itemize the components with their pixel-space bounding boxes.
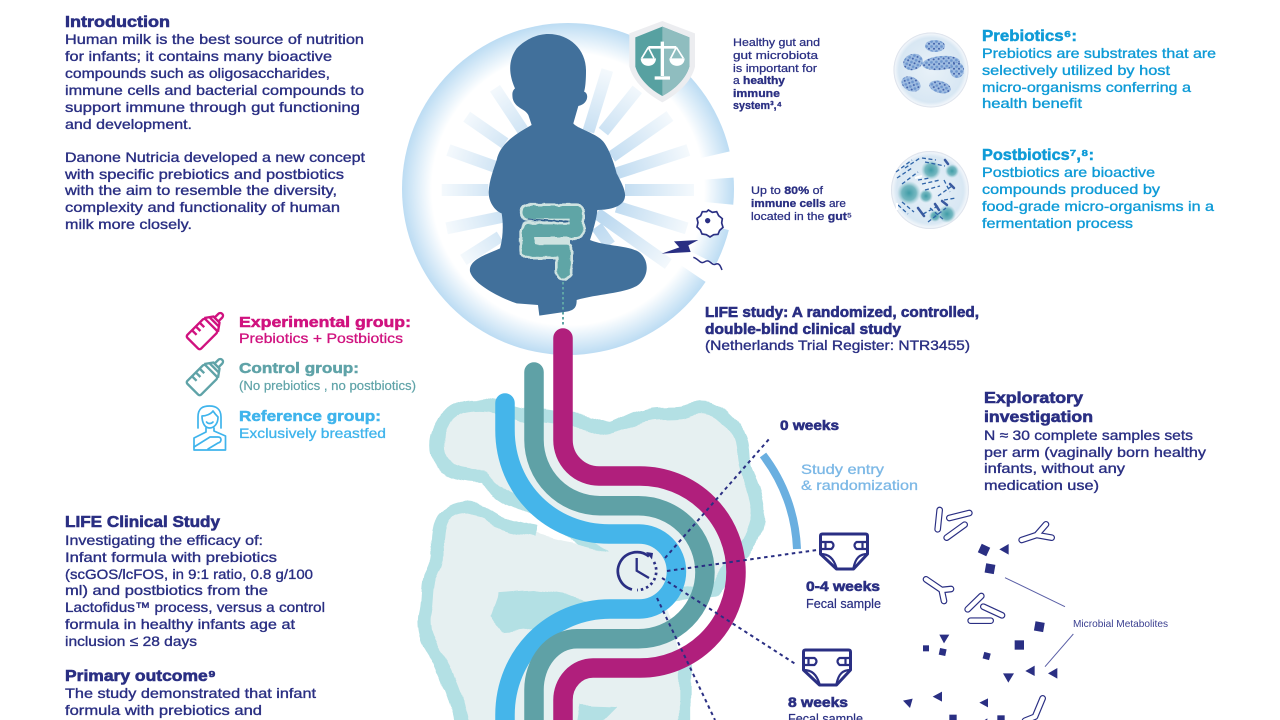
text block: introduction paragraph 2: Danone Nutricia developed a new concept [65, 149, 365, 165]
text: exploratory investigation: infants, without any [984, 460, 1125, 476]
text block: primary outcome [65, 685, 316, 718]
text block: primary outcome: formula with prebiotics and [65, 702, 262, 718]
heading: postbiotics: Postbiotics⁷,⁸: [982, 147, 1094, 164]
text block: introduction paragraph 2: with specific prebiotics and postbiotics [64, 166, 344, 182]
label: 0-4 weeks: 0-4 weeks [806, 578, 880, 594]
text block: introduction paragraph 1: compounds such as oligosaccharides, [65, 65, 330, 81]
icon: teal bottle [186, 353, 229, 396]
text block: study description: Lactofidus™ process, versus a control [65, 599, 325, 615]
text block: introduction paragraph 1: and development. [65, 116, 192, 132]
icon: prebiotics petri dish [894, 32, 968, 108]
illustration: gut background [425, 405, 759, 720]
label: 8 weeks: 8 weeks [788, 694, 848, 710]
leader lines [1005, 578, 1073, 667]
text block: introduction paragraph 1 [65, 31, 364, 132]
icon: breastfeeding mother [194, 406, 226, 450]
label: 0-4 weeks [806, 578, 881, 611]
label: experimental group: Experimental group: [239, 314, 411, 331]
text: healthy gut callout: Healthy gut and [733, 37, 820, 49]
text block: introduction paragraph 2: complexity and functionality of human [65, 199, 340, 215]
halo circle [402, 23, 734, 355]
metabolites [903, 544, 1057, 720]
label: 8 weeks [788, 694, 863, 720]
text block: study description: inclusion ≤ 28 days [65, 633, 197, 649]
label: control group: (No prebiotics , no postbiotics) [239, 378, 416, 393]
text: prebiotics: micro-organisms conferring a [982, 79, 1191, 95]
icon: magenta bottle [186, 307, 229, 350]
heading: LIFE clinical study: LIFE Clinical Study [65, 514, 220, 531]
chart: three group pathways [505, 338, 736, 720]
label: study entry and randomization: Study entry [801, 461, 884, 477]
rays [442, 70, 694, 264]
legend: study groups [186, 307, 416, 450]
text: healthy gut callout: gut microbiota [733, 50, 819, 62]
icon: immune cell, lightning and bacterium [662, 210, 723, 270]
text block: study description: formula in healthy infants age at [65, 616, 295, 632]
text: exploratory investigation: Exploratory [984, 390, 1083, 407]
arc: study entry timeline [763, 455, 797, 549]
text: exploratory investigation: investigation [984, 409, 1093, 426]
pathway: reference group [505, 403, 676, 720]
text: prebiotics: health benefit [982, 95, 1082, 111]
text: healthy gut callout: a healthy [733, 75, 786, 87]
label: microbial metabolites: Microbial Metabolites [1073, 618, 1168, 630]
label: experimental group [239, 314, 411, 346]
icon: diaper 8 weeks [804, 650, 850, 685]
heading: introduction: Introduction [65, 14, 170, 31]
label: experimental group: Prebiotics + Postbiotics [239, 330, 403, 346]
text: immune cells callout: Up to 80% of [751, 185, 824, 197]
text: exploratory investigation: per arm (vaginally born healthy [984, 444, 1206, 460]
label: control group: Control group: [239, 360, 359, 377]
text: postbiotics: compounds produced by [982, 181, 1160, 197]
text: immune cells callout [751, 185, 852, 223]
label: control group [239, 360, 416, 393]
label: reference group [239, 408, 386, 441]
text block: primary outcome: The study demonstrated that infant [65, 685, 316, 701]
text: immune cells callout: located in the gut⁵ [751, 211, 852, 223]
pathway: experimental group [563, 338, 736, 720]
text: exploratory investigation: medication use) [984, 477, 1099, 493]
text block: study description: ml) and postbiotics from the [65, 582, 268, 598]
icon: clock [618, 552, 656, 590]
text: immune cells callout: immune cells are [751, 198, 846, 210]
text: LIFE study title [705, 305, 979, 353]
text: postbiotics: Postbiotics are bioactive [982, 164, 1155, 180]
text: LIFE study title: double-blind clinical study [705, 322, 901, 338]
icon: shield with scales [629, 21, 695, 102]
label: reference group: Exclusively breastfed [239, 425, 386, 441]
text: prebiotics: Prebiotics are substrates that are [982, 45, 1216, 61]
text: postbiotics: fermentation process [982, 215, 1133, 231]
text: healthy gut callout: immune [733, 88, 780, 100]
text block: study description: (scGOS/lcFOS, in 9:1 ratio, 0.8 g/100 [65, 566, 313, 582]
illustration: baby in halo [402, 23, 757, 355]
text block: introduction paragraph 1: support immune through gut functioning [65, 99, 360, 115]
text block: introduction paragraph 2 [64, 149, 365, 232]
panel: introduction [64, 14, 365, 232]
text block: introduction paragraph 1: immune cells and bacterial compounds to [65, 82, 364, 98]
label: study entry and randomization [801, 461, 918, 493]
illustration: microbes and metabolites [903, 510, 1073, 720]
heading: prebiotics: Prebiotics⁶: [982, 28, 1077, 45]
icon: postbiotics petri dish [891, 151, 969, 229]
text: exploratory investigation: N ≈ 30 complete samples sets [984, 427, 1193, 443]
text block: introduction paragraph 1: Human milk is the best source of nutrition [65, 31, 364, 47]
text: prebiotics: selectively utilized by host [982, 62, 1170, 78]
text: postbiotics: food-grade micro-organisms in a [982, 198, 1214, 214]
text: healthy gut callout: is important for [733, 63, 817, 75]
text: healthy gut callout [733, 37, 820, 112]
text block: introduction paragraph 1: for infants; it contains many bioactive [65, 48, 332, 64]
label: 0 weeks: 0 weeks [780, 417, 839, 433]
label: 0-4 weeks: Fecal sample [806, 596, 881, 611]
icon: diaper 0-4 weeks [820, 534, 868, 569]
text: exploratory investigation [984, 390, 1206, 493]
icon: intestine [528, 212, 576, 272]
bacteria outlines [926, 510, 1052, 720]
text block: study description: Investigating the efficacy of: [65, 532, 263, 548]
text block: study description [65, 532, 325, 649]
text: prebiotics [982, 28, 1216, 111]
text: LIFE study title: LIFE study: A randomized, controlled, [705, 305, 979, 321]
text: postbiotics [982, 147, 1214, 231]
text: LIFE study title: (Netherlands Trial Register: NTR3455) [705, 337, 970, 353]
label: reference group: Reference group: [239, 408, 381, 425]
dotted connector [562, 282, 564, 327]
baby silhouette [470, 34, 647, 316]
text block: introduction paragraph 2: milk more closely. [65, 216, 192, 232]
connector lines: timeline [657, 438, 817, 720]
text: healthy gut callout: system³,⁴ [733, 100, 782, 112]
text block: study description: Infant formula with prebiotics [65, 549, 277, 565]
panel: LIFE clinical study [65, 514, 325, 718]
heading: primary outcome: Primary outcome⁹ [65, 668, 216, 685]
pathway: control group [534, 372, 705, 720]
text block: introduction paragraph 2: with the aim to resemble the diversity, [64, 182, 337, 198]
label: study entry and randomization: & randomization [801, 477, 918, 493]
